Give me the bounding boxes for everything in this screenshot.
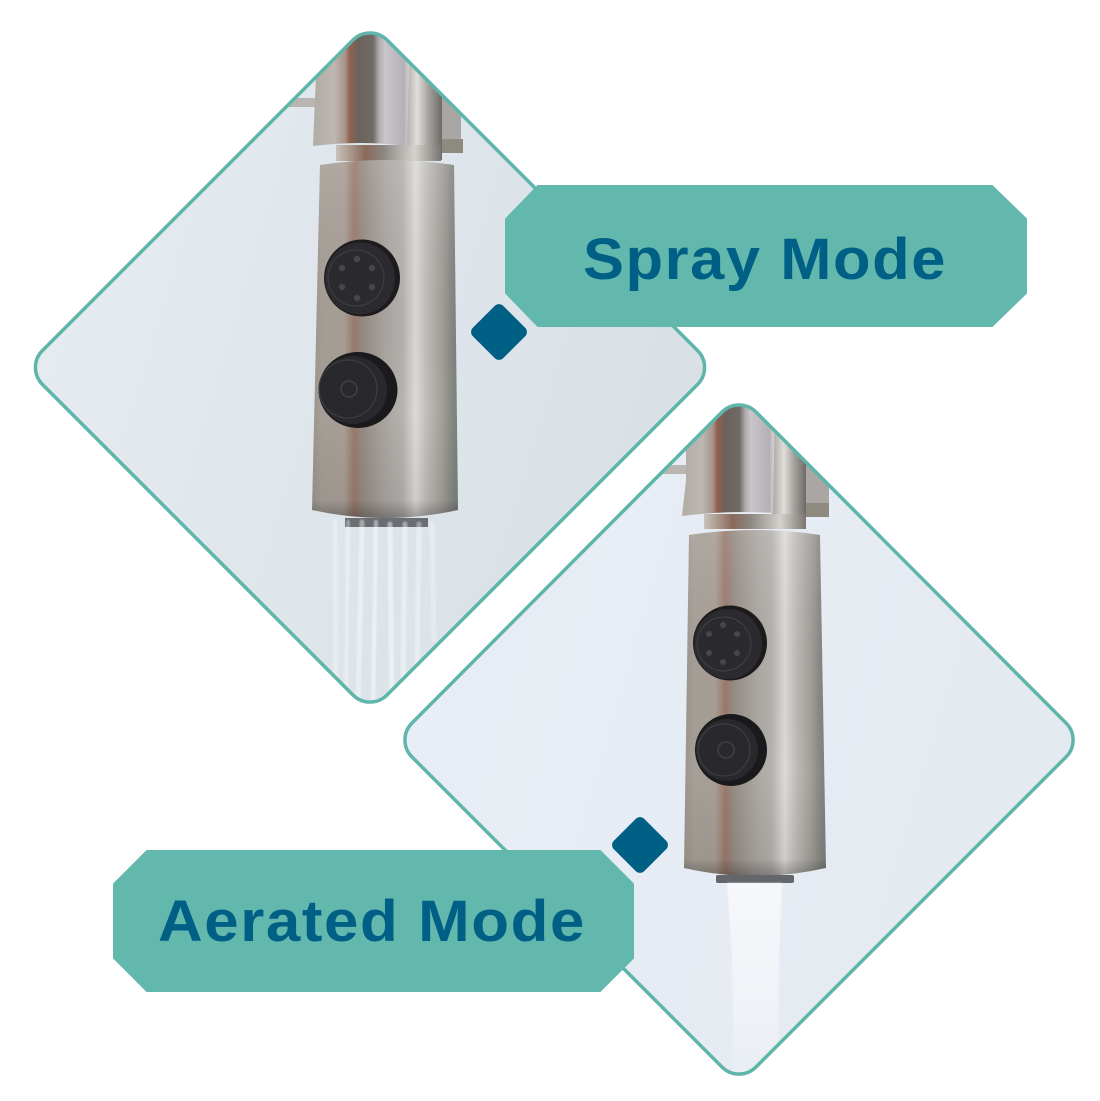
button: lower round (695, 714, 767, 786)
button: lower round (318, 352, 398, 428)
label: aerated mode (114, 851, 633, 991)
heading: spray mode: Spray Mode (583, 227, 947, 292)
aerated water stream (726, 882, 782, 1026)
water spray streams (335, 522, 434, 710)
icon: spray diamond marker (469, 302, 529, 362)
heading: aerated mode: Aerated Mode (158, 889, 586, 954)
button: upper with dots (324, 240, 400, 316)
faucet head: spray (285, 25, 463, 710)
label: spray mode (506, 186, 1026, 326)
button: upper with dots (693, 606, 767, 680)
faucet head: aerated (660, 400, 829, 1075)
icon: aerated diamond marker (610, 815, 670, 875)
panel: spray mode photo (35, 25, 705, 710)
panel: aerated mode photo (405, 400, 1073, 1075)
